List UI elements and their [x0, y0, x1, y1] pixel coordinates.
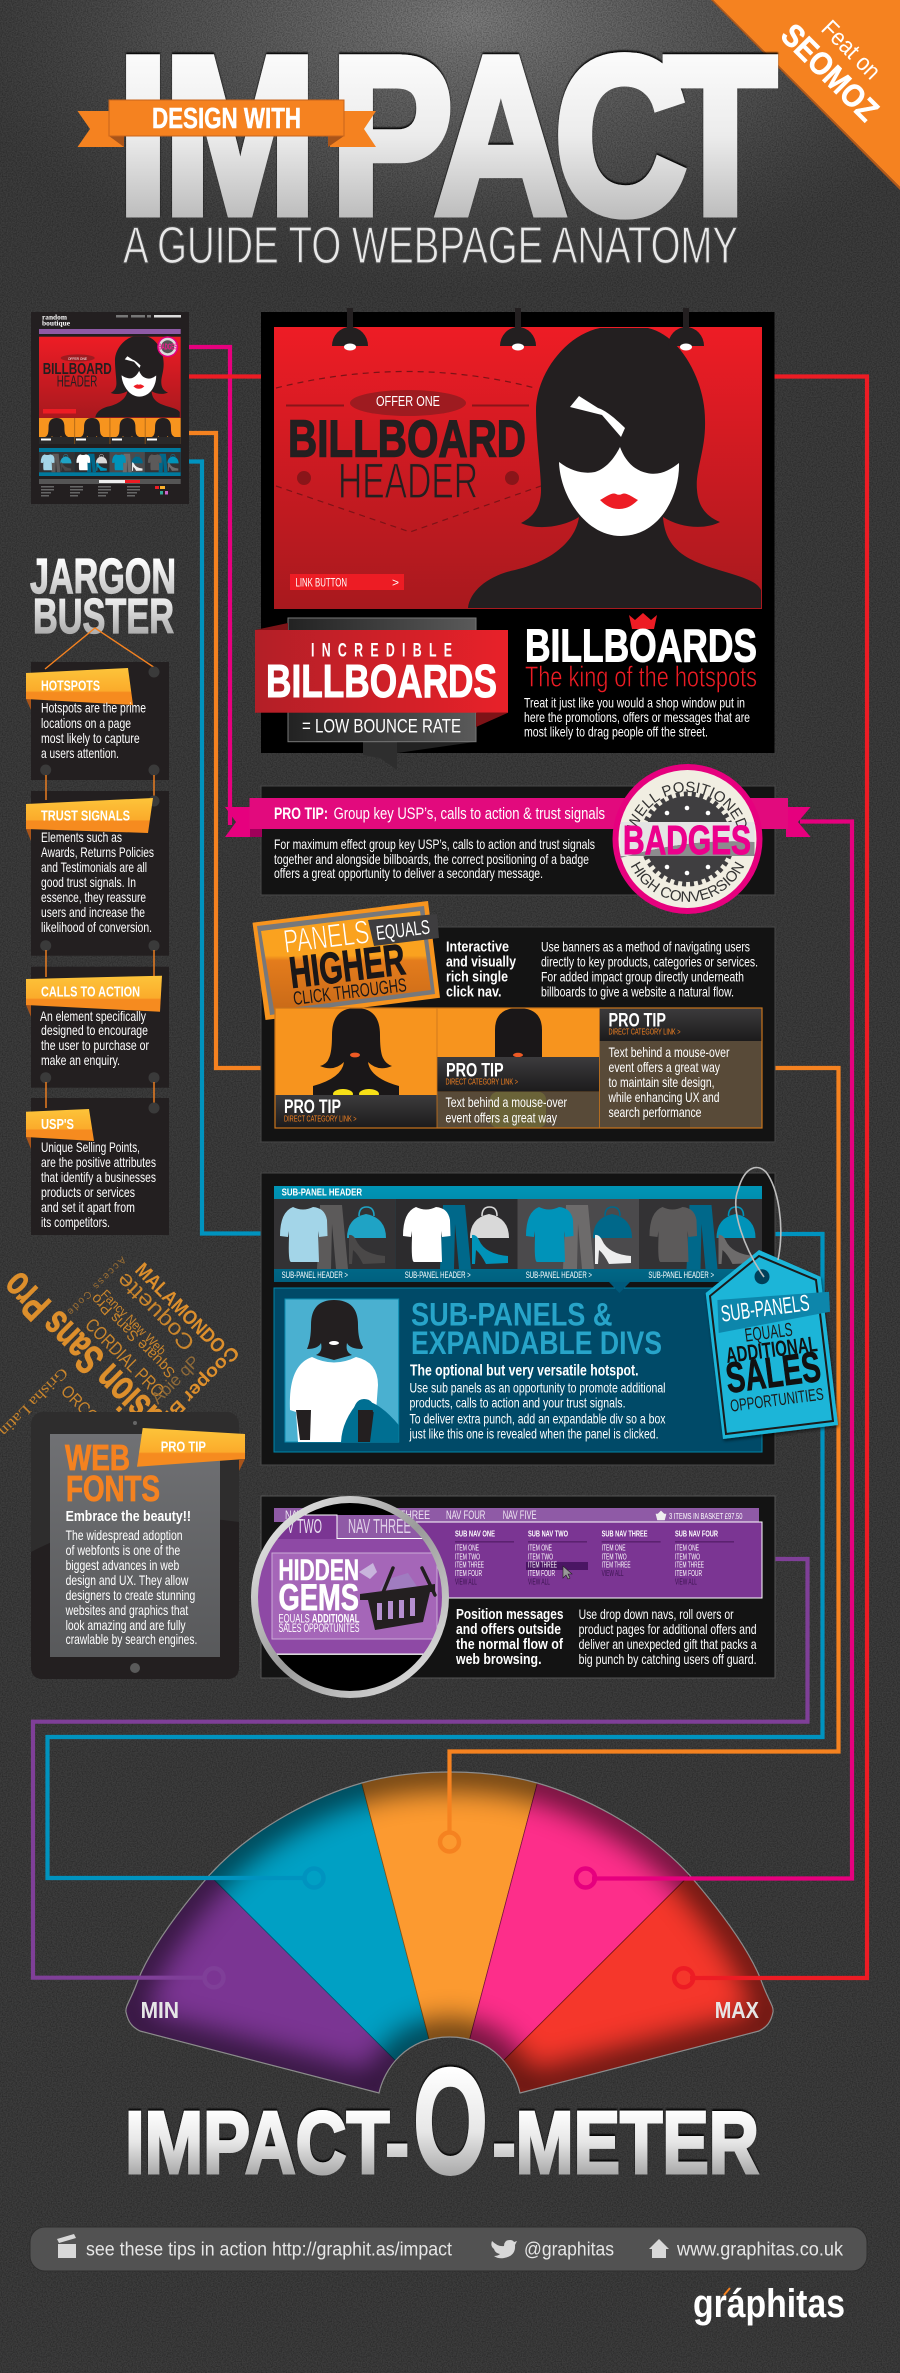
- panel: hidden gems: Position messages: [456, 1606, 564, 1623]
- tablet: web fonts: FONTS: [66, 1468, 160, 1509]
- gauge rings: [204, 1832, 693, 1987]
- footer bar: @graphitas: [524, 2240, 614, 2261]
- banner group: [275, 1008, 762, 1128]
- magnifier: hidden gems: EQUALS ADDITIONAL: [278, 1614, 360, 1626]
- offer oval: [286, 390, 529, 416]
- panel: hidden gems: Use drop down navs, roll overs or: [579, 1606, 734, 1622]
- billboard header text: BILLBOARD: [288, 411, 526, 469]
- card: usps: Unique Selling Points,: [41, 1139, 140, 1155]
- panel: panels: billboards to give a website a natural flow.: [541, 984, 734, 1000]
- connector lines: [33, 347, 867, 1978]
- icon: crown: [629, 613, 657, 629]
- billboard woman illustration: [468, 328, 761, 608]
- dropdown menu: SUB NAV FOUR: [675, 1529, 718, 1539]
- font word cloud: Square Sans Pro: [88, 1290, 179, 1381]
- dropdown menu: SUB NAV THREE: [602, 1529, 648, 1539]
- icon: twitter bird: [491, 2240, 517, 2258]
- panel: billboards: HEADER: [338, 453, 478, 509]
- card: trust signals: [26, 775, 169, 956]
- magnifier: hidden gems: GEMS: [278, 1577, 359, 1618]
- font word cloud: CORDIAL PRO: [80, 1315, 168, 1402]
- icon: cursor: [563, 1566, 572, 1579]
- card: trust signals: TRUST SIGNALS: [41, 808, 130, 825]
- footer bar: see these tips in action http://graphit.as/impact: [86, 2240, 453, 2261]
- card: usps: and set it apart from: [41, 1199, 135, 1215]
- panel: panels: rich single: [446, 969, 508, 986]
- panel: hidden gems: product pages for additional offers and: [579, 1621, 757, 1637]
- panel: panels: directly to key products, categories or services.: [541, 954, 758, 970]
- tablet: web fonts: designers to create stunning: [66, 1587, 195, 1603]
- dropdown menu: ITEM FOUR: [455, 1568, 482, 1578]
- ribbon: pro tip: PRO TIP: [161, 1439, 206, 1456]
- banner cell 2: Text behind a mouse-over: [446, 1094, 567, 1110]
- font word cloud: MALAMONDO: [130, 1259, 229, 1358]
- badge: WELL POSITIONED: [627, 782, 747, 826]
- tablet: web fonts: Embrace the beauty!!: [66, 1509, 191, 1525]
- sub-panel strip: [274, 1186, 762, 1282]
- dropdown menu: ITEM FOUR: [675, 1568, 702, 1578]
- font word cloud: [0, 1254, 243, 1459]
- tablet: web fonts: design and UX. They allow: [66, 1572, 189, 1588]
- font word cloud: Access Code: [64, 1254, 128, 1317]
- sign: panels equals higher click throughs: [252, 901, 440, 1020]
- tablet: web fonts: WEB: [65, 1437, 130, 1478]
- expandable illustration: [285, 1299, 399, 1442]
- dropdown menu: ITEM FOUR: [528, 1568, 555, 1578]
- sign: panels equals higher click throughs: EQUALS: [375, 917, 431, 945]
- banner cell 3: Text behind a mouse-over: [608, 1044, 730, 1060]
- magnifier: hidden gems: NAV THREE: [348, 1516, 411, 1538]
- icon: clapperboard: [57, 2234, 76, 2258]
- card: hotspots: Hotspots are the prime: [41, 700, 146, 716]
- expandable panel: [274, 1282, 762, 1452]
- panel: hidden gems: NAV FOUR: [446, 1508, 486, 1522]
- font word cloud: Fancy New Web: [98, 1287, 169, 1358]
- dropdown menu: ITEM THREE: [602, 1560, 631, 1570]
- card: hotspots: HOTSPOTS: [41, 678, 100, 695]
- price tag: sub-panels: ADDITIONAL: [724, 1331, 819, 1368]
- dropdown menu: [400, 1522, 762, 1598]
- panel: pro tip: [225, 786, 811, 895]
- price tag: sub-panels: SUB-PANELS: [719, 1289, 811, 1327]
- dropdown menu: VIEW ALL: [602, 1568, 624, 1578]
- ribbon: design with: [78, 100, 376, 147]
- title: IMPACT: IMPACT: [118, 12, 776, 261]
- banner cell 3: while enhancing UX and: [608, 1089, 720, 1105]
- panel: hidden gems: NAV FIVE: [503, 1508, 537, 1522]
- panel: hidden gems: and offers outside: [456, 1621, 561, 1638]
- lamps: [332, 308, 704, 350]
- corner banner: feat on SEOMOZ: Feat on: [816, 15, 886, 85]
- sub-panel strip: SUB-PANEL HEADER >: [282, 1270, 348, 1280]
- link button: >: [392, 576, 399, 590]
- footer bar: [30, 2227, 867, 2271]
- ribbon: pro tip: [137, 1428, 245, 1471]
- billboards heading: here the promotions, offers or messages that are: [524, 709, 750, 725]
- font word cloud: ORCO: [57, 1381, 102, 1427]
- billboards heading: The king of the hotspots: [525, 662, 757, 694]
- panel: hidden gems: the normal flow of: [456, 1636, 564, 1653]
- link button: [290, 574, 404, 590]
- banner cell 2: event offers a great way: [446, 1110, 557, 1126]
- card: usps: that identify a businesses: [41, 1169, 156, 1185]
- dropdown menu: ITEM THREE: [455, 1560, 484, 1570]
- panel: pro tip: together and alongside billboards, the correct positioning of a badge: [274, 851, 589, 867]
- website thumbnail: random: [42, 314, 67, 322]
- sign: panels equals higher click throughs: PANELS: [281, 913, 371, 960]
- expandable panel: just like this one is revealed when the panel is clicked.: [409, 1425, 658, 1441]
- panel: hidden gems: web browsing.: [455, 1651, 542, 1668]
- banner cell 3: event offers a great way: [608, 1059, 720, 1075]
- card: trust signals: good trust signals. In: [41, 874, 136, 890]
- gauge label: max: MAX: [715, 1997, 760, 2023]
- sign: panels equals higher click throughs: HIGHER: [287, 935, 408, 998]
- magnifier: hidden gems: [250, 1495, 450, 1700]
- website thumbnail: OFFER ONE: [68, 356, 87, 361]
- panel: panels: click nav.: [446, 984, 502, 1001]
- dropdown menu: VIEW ALL: [528, 1577, 550, 1587]
- sub-panel strip: SUB-PANEL HEADER: [282, 1187, 362, 1199]
- panel: hidden gems: big punch by catching users off guard.: [579, 1651, 757, 1667]
- price tag: sub-panels: SALES: [723, 1343, 823, 1403]
- panel: sub-panels: [261, 1173, 775, 1465]
- banner cell 3: DIRECT CATEGORY LINK >: [608, 1027, 681, 1037]
- card: trust signals: and Testimonials are all: [41, 859, 147, 875]
- sign: panels equals higher click throughs: CLICK THROUGHS: [292, 975, 408, 1010]
- font word cloud: Coquette: [111, 1268, 200, 1356]
- card: trust signals: Awards, Returns Policies: [41, 844, 154, 860]
- card: calls to action: designed to encourage: [41, 1022, 148, 1038]
- offer oval: OFFER ONE: [376, 393, 440, 410]
- panel: panels: and visually: [446, 954, 517, 971]
- card: trust signals: Elements such as: [41, 829, 122, 845]
- price tag: sub-panels: [706, 1168, 838, 1439]
- tablet: web fonts: The widespread adoption: [66, 1527, 183, 1543]
- dropdown menu: VIEW ALL: [675, 1577, 697, 1587]
- card: usps: its competitors.: [41, 1214, 110, 1230]
- tablet: web fonts: crawlable by search engines.: [66, 1631, 197, 1647]
- heading: jargon buster: BUSTER: [33, 590, 174, 644]
- expandable panel: SUB-PANELS &: [411, 1297, 612, 1333]
- icon: basket: [359, 1563, 435, 1630]
- icon: home: [649, 2239, 669, 2258]
- font word cloud: Abie qP: [147, 1352, 203, 1408]
- magnifier: hidden gems: SALES OPPORTUNITES: [278, 1623, 360, 1635]
- dropdown menu: ITEM ONE: [455, 1543, 479, 1553]
- card: trust signals: users and increase the: [41, 904, 145, 920]
- dropdown menu: ITEM ONE: [602, 1543, 626, 1553]
- dropdown menu: SUB NAV ONE: [455, 1529, 495, 1539]
- card: trust signals: essence, they reassure: [41, 889, 146, 905]
- panel: hidden gems: [261, 1496, 775, 1678]
- banner cell 1: DIRECT CATEGORY LINK >: [284, 1114, 357, 1124]
- card: usps: products or services: [41, 1184, 135, 1200]
- font word cloud: Grisha Latin: [0, 1364, 70, 1440]
- card: usps: are the positive attributes: [41, 1154, 156, 1170]
- expandable panel: Use sub panels as an opportunity to promote additional: [410, 1380, 666, 1396]
- dropdown menu: ITEM ONE: [675, 1543, 699, 1553]
- billboards heading: most likely to drag people off the street.: [524, 724, 708, 740]
- ribbon: incredible billboards: INCREDIBLE: [311, 640, 452, 661]
- banner cell 3: to maintain site design,: [608, 1074, 714, 1090]
- heading: jargon buster: [30, 550, 176, 644]
- ribbon: design with: DESIGN WITH: [152, 103, 301, 135]
- panel: pro tip: Group key USP’s, calls to action & trust signals: [334, 804, 605, 823]
- card: calls to action: An element specifically: [40, 1008, 146, 1024]
- icon: basket small: [656, 1511, 666, 1520]
- card: calls to action: make an enquiry.: [41, 1052, 120, 1068]
- banner cell 3: PRO TIP: [608, 1011, 666, 1032]
- link button: LINK BUTTON: [296, 576, 347, 590]
- card: calls to action: the user to purchase or: [41, 1037, 149, 1053]
- website thumbnail: HEADER: [57, 374, 97, 391]
- dropdown menu: ITEM TWO: [602, 1551, 627, 1561]
- panel: panels: Interactive: [446, 939, 509, 956]
- badge: BADGES: [623, 817, 751, 863]
- expandable panel: The optional but very versatile hotspot.: [410, 1363, 638, 1380]
- banner cell 1: PRO TIP: [284, 1097, 341, 1118]
- magnifier: hidden gems: V TWO: [287, 1516, 322, 1538]
- card: usps: USP'S: [41, 1116, 74, 1133]
- tag ring: [736, 1168, 781, 1277]
- panel: pro tip: For maximum effect group key USP’s, calls to action and trust signals: [274, 836, 595, 852]
- panel: pro tip: PRO TIP:: [274, 804, 328, 823]
- panel: panels: For added impact group directly underneath: [541, 969, 744, 985]
- card: hotspots: [26, 628, 169, 780]
- sub-panel strip: SUB-PANEL HEADER >: [648, 1270, 714, 1280]
- heading: impact-o-meter: [125, 2037, 759, 2205]
- banner cell 3: [599, 1008, 762, 1128]
- gauge label: min: MIN: [141, 1997, 179, 2023]
- card: trust signals: likelihood of conversion.: [41, 919, 152, 935]
- dropdown menu: ITEM THREE: [528, 1560, 557, 1570]
- panel: hidden gems: NAV ONE: [285, 1508, 325, 1522]
- corner banner: feat on SEOMOZ: [711, 0, 900, 190]
- font word cloud: Cooper Black: [136, 1342, 243, 1449]
- card: usps: [26, 1082, 169, 1235]
- expandable panel: EXPANDABLE DIVS: [411, 1325, 662, 1361]
- price tag: sub-panels: EQUALS: [744, 1320, 794, 1347]
- card: calls to action: CALLS TO ACTION: [41, 984, 140, 1001]
- dropdown menu: ITEM ONE: [528, 1543, 552, 1553]
- dropdown menu: VIEW ALL: [455, 1577, 477, 1587]
- dropdown menu: ITEM TWO: [528, 1551, 553, 1561]
- panel: hidden gems: 3 ITEMS IN BASKET £97.50: [669, 1512, 743, 1521]
- panel: hidden gems: NAV THREE: [380, 1508, 430, 1522]
- tablet: web fonts: [31, 1412, 245, 1679]
- expandable panel: To deliver extra punch, add an expandable div so a box: [410, 1410, 666, 1426]
- tablet: web fonts: websites and graphics that: [65, 1602, 188, 1618]
- badge: [612, 764, 762, 914]
- billboards heading: [524, 613, 757, 740]
- dropdown menu: ITEM TWO: [675, 1551, 700, 1561]
- magnifier: hidden gems: HIDDEN: [278, 1554, 359, 1587]
- banner cell 2: DIRECT CATEGORY LINK >: [446, 1076, 518, 1086]
- website thumbnail: BILLBOARD: [43, 361, 112, 378]
- banner cell 2: [437, 1008, 599, 1128]
- panel: hidden gems: deliver an unexpected gift that packs a: [579, 1636, 757, 1652]
- heading: jargon buster: JARGON: [30, 550, 176, 604]
- footer bar: www.graphitas.co.uk: [676, 2240, 843, 2261]
- banner cell 2: PRO TIP: [446, 1061, 504, 1082]
- panel: billboards: [261, 308, 774, 753]
- website thumbnail: BADGES: [158, 342, 177, 352]
- card: hotspots: locations on a page: [41, 715, 131, 731]
- sub-panel strip: SUB-PANEL HEADER >: [405, 1270, 471, 1280]
- tablet: web fonts: biggest advances in web: [66, 1557, 179, 1573]
- tablet: web fonts: look amazing and are fully: [66, 1617, 186, 1633]
- corner banner: feat on SEOMOZ: SEOMOZ: [774, 16, 886, 128]
- dropdown menu: ITEM THREE: [675, 1560, 704, 1570]
- panel: panels: Use banners as a method of navigating users: [541, 939, 750, 955]
- heading: impact-o-meter: -METER: [492, 2093, 759, 2192]
- ribbon: incredible billboards: [255, 618, 508, 770]
- tablet: web fonts: of webfonts is one of the: [66, 1542, 180, 1558]
- impact-o-meter gauge: [125, 1771, 774, 2094]
- ribbon: incredible billboards: BILLBOARDS: [266, 655, 497, 707]
- website thumbnail: boutique: [42, 320, 70, 328]
- heading: impact-o-meter: IMPACT-: [125, 2093, 409, 2192]
- dropdown menu: SUB NAV TWO: [528, 1529, 568, 1539]
- price tag: sub-panels: OPPORTUNITIES: [729, 1385, 825, 1416]
- logo: graphitas: gráphitas: [693, 2282, 845, 2326]
- banner cell 1: [275, 1008, 437, 1128]
- billboards heading: BILLBOARDS: [525, 620, 757, 672]
- dropdown menu: ITEM TWO: [455, 1551, 480, 1561]
- ribbon: incredible billboards: = LOW BOUNCE RATE: [302, 717, 461, 738]
- sub-panel strip: SUB-PANEL HEADER >: [526, 1270, 592, 1280]
- card: calls to action: [26, 950, 169, 1088]
- website thumbnail: [31, 312, 189, 504]
- heading: impact-o-meter: O: [413, 2037, 488, 2205]
- card: hotspots: a users attention.: [41, 745, 119, 761]
- panel: panels: [252, 901, 775, 1142]
- billboards heading: Treat it just like you would a shop window put in: [524, 695, 745, 711]
- banner cell 3: search performance: [608, 1104, 702, 1120]
- expandable panel: products, calls to action and your trust signals.: [410, 1395, 626, 1411]
- badge: HIGH CONVERSION: [630, 862, 744, 902]
- card: hotspots: most likely to capture: [41, 730, 140, 746]
- panel: pro tip: offers a great opportunity to deliver a secondary message.: [274, 865, 543, 881]
